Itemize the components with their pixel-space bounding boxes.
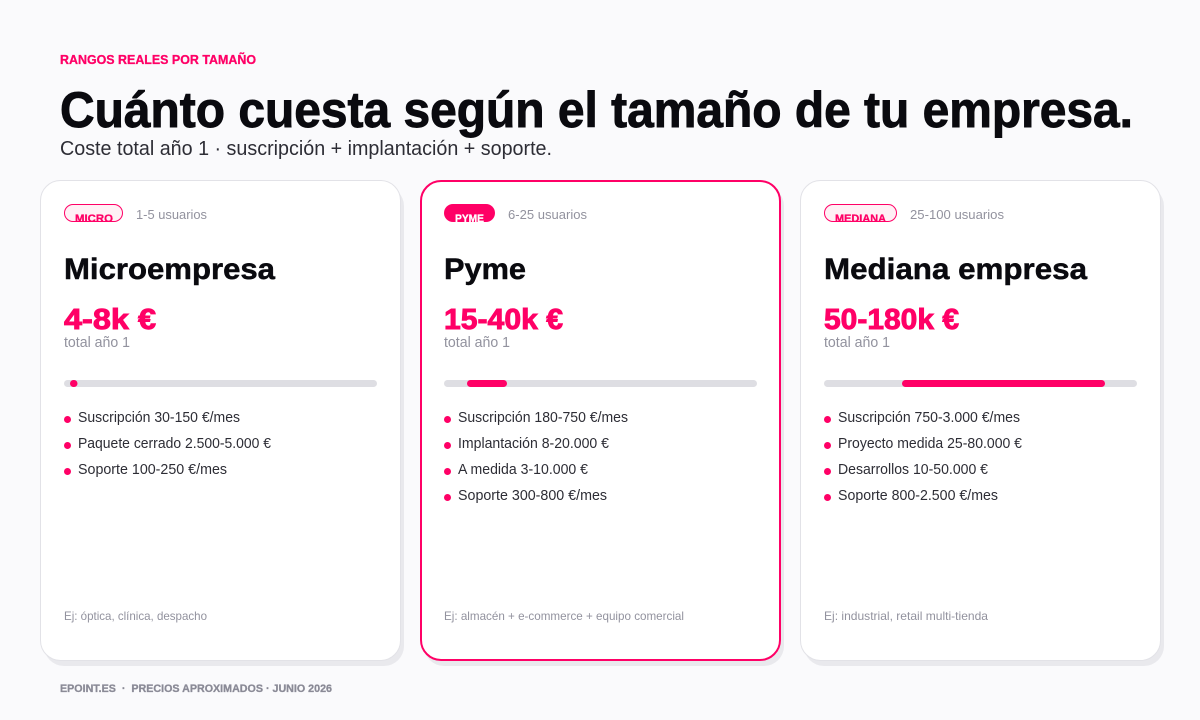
list: Paquete cerrado 2.500-5.000 € [78,436,271,452]
list: Soporte 800-2.500 €/mes [838,488,998,504]
users: 25-100 usuarios [910,207,1004,222]
badge: mediana: MEDIANA [835,213,886,225]
price: 50-180k € [824,304,959,336]
list [444,410,628,504]
list: Soporte 300-800 €/mes [458,488,607,504]
price note: total año 1 [64,335,130,351]
panel: pyme [421,181,784,666]
list: Desarrollos 10-50.000 € [838,462,988,478]
range bar [824,380,1137,387]
badge: mediana [824,204,897,222]
badge: micro [64,204,123,222]
example: Ej: industrial, retail multi-tienda [824,609,988,623]
badge: pyme [444,204,495,222]
users: 6-25 usuarios [508,207,587,222]
list: A medida 3-10.000 € [458,462,588,478]
heading: Mediana empresa [824,253,1087,286]
heading: Microempresa [64,253,275,286]
range bar [444,380,757,387]
list: Suscripción 750-3.000 €/mes [838,410,1020,426]
subtitle: Coste total año 1 · suscripción + implantación + soporte. [60,138,552,160]
price note: total año 1 [824,335,890,351]
list [824,410,1022,504]
list: Proyecto medida 25-80.000 € [838,436,1022,452]
heading: Pyme [444,253,526,286]
example: Ej: óptica, clínica, despacho [64,609,207,623]
list: Suscripción 30-150 €/mes [78,410,240,426]
eyebrow: RANGOS REALES POR TAMAÑO [60,52,256,67]
footer: EPOINT.ES · PRECIOS APROXIMADOS · JUNIO 2026 [60,683,332,695]
example: Ej: almacén + e-commerce + equipo comercial [444,609,684,623]
price: 4-8k € [64,304,156,336]
list [64,410,271,478]
badge: pyme: PYME [455,213,484,225]
panel: microempresa [40,180,404,666]
price note: total año 1 [444,335,510,351]
users: 1-5 usuarios [136,207,207,222]
list: Implantación 8-20.000 € [458,436,609,452]
range bar [64,380,377,387]
list: Soporte 100-250 €/mes [78,462,227,478]
badge: micro: MICRO [75,213,113,225]
list: Suscripción 180-750 €/mes [458,410,628,426]
panel: mediana empresa [800,180,1164,666]
price: 15-40k € [444,304,563,336]
title: Cuánto cuesta según el tamaño de tu empresa. [60,82,1133,138]
